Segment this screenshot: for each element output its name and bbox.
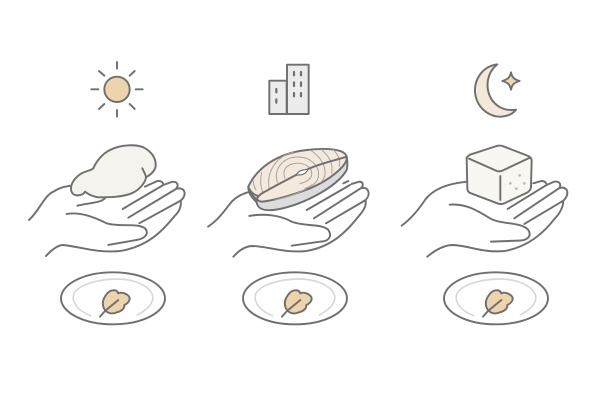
food: tofu cube bbox=[467, 146, 532, 204]
icon: crescent moon and star bbox=[475, 64, 520, 117]
icon: sun bbox=[91, 62, 143, 117]
food: leaf bbox=[483, 290, 513, 317]
icon: plate centre bbox=[243, 272, 347, 324]
icon: hand holding salmon bbox=[208, 181, 369, 257]
panel: night column bbox=[402, 64, 567, 257]
food: chicken breast bbox=[71, 145, 156, 197]
panel: morning column bbox=[29, 62, 185, 256]
icon: city buildings bbox=[269, 65, 309, 114]
food: salmon steak bbox=[248, 149, 347, 210]
icon: plate left bbox=[61, 272, 165, 324]
food: leaf bbox=[100, 290, 130, 317]
icon: hand holding tofu bbox=[402, 181, 567, 257]
panel: daytime column bbox=[208, 65, 369, 257]
icon: hand holding chicken bbox=[29, 181, 185, 256]
icon: plate right bbox=[444, 272, 548, 324]
food: leaf bbox=[282, 290, 312, 317]
